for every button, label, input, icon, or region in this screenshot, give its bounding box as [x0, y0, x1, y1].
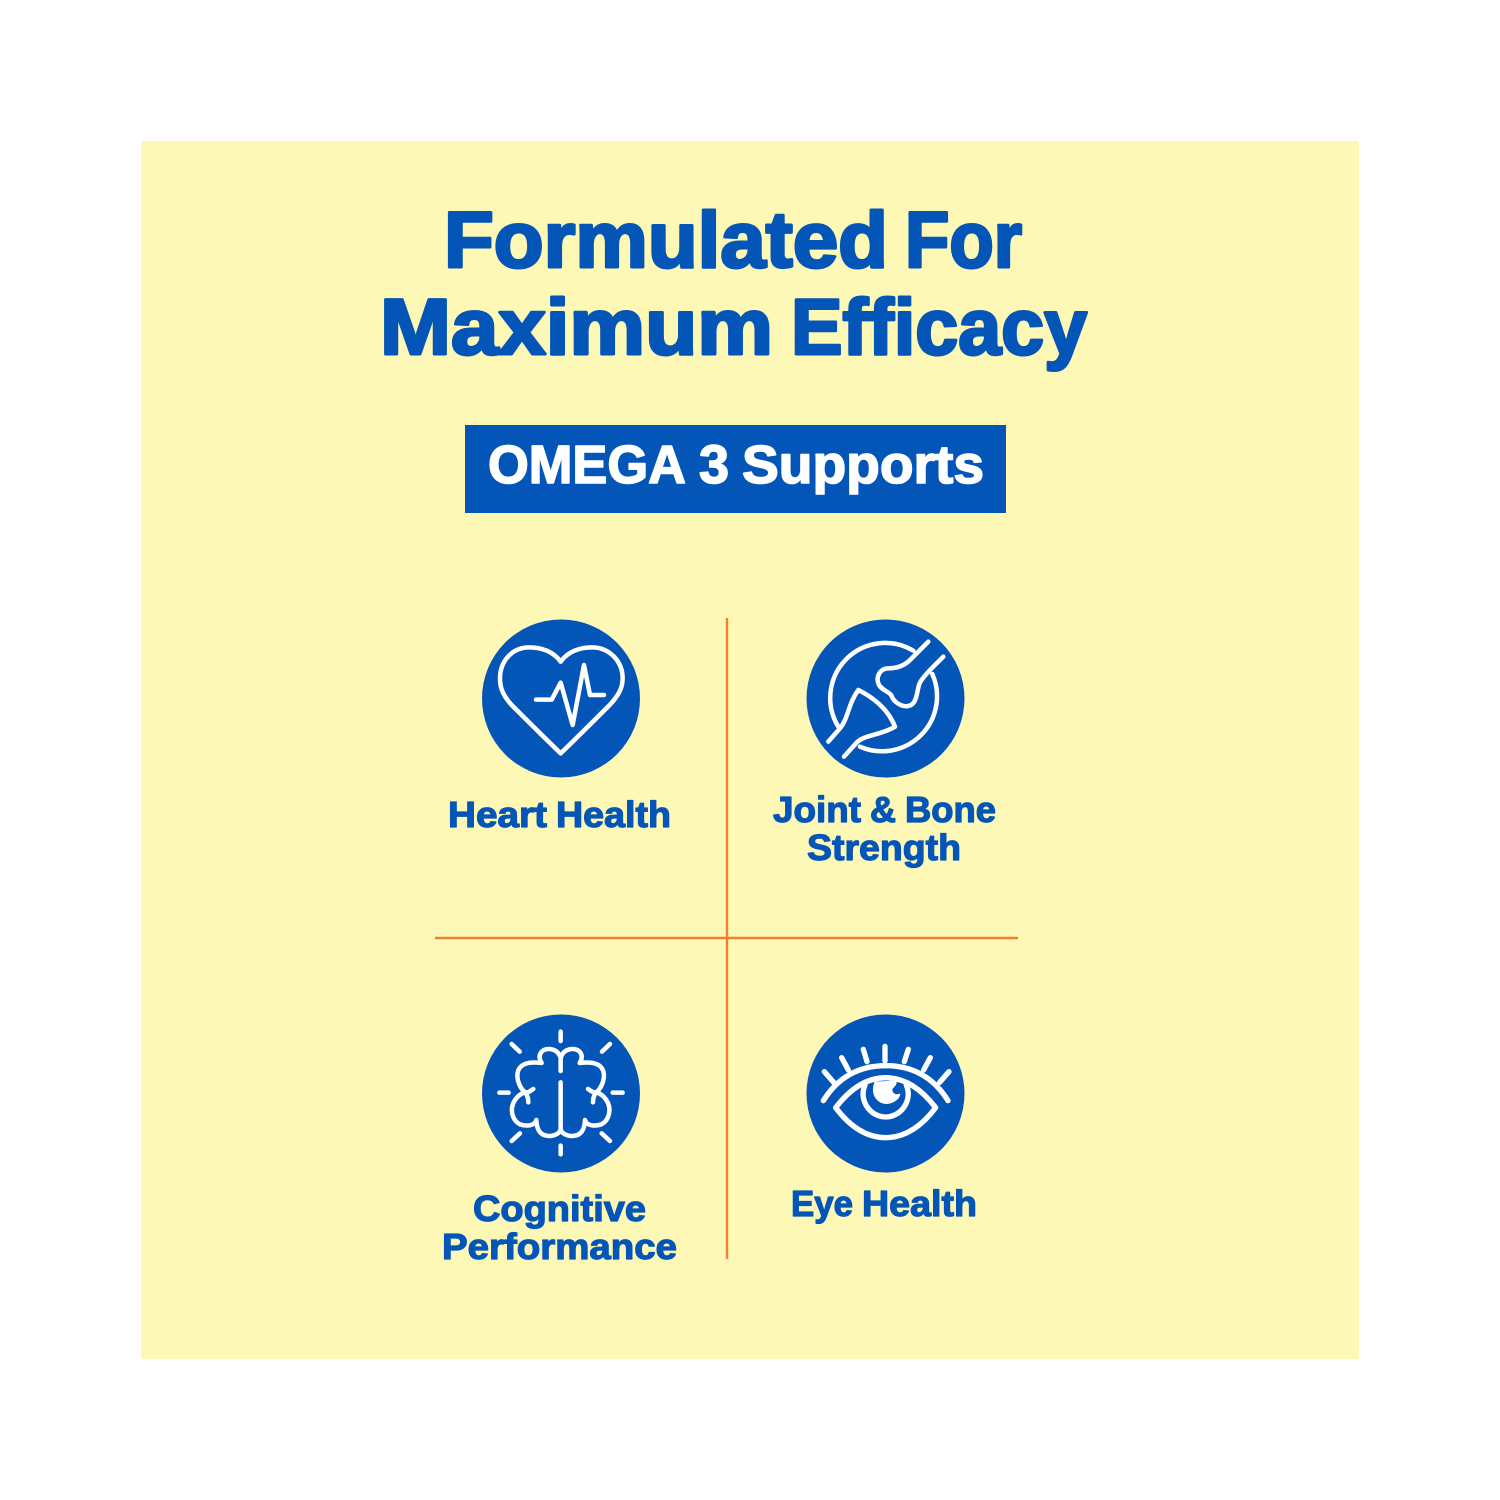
label: Cognitive Performance: Performance — [442, 1226, 677, 1267]
icon: joint — [806, 620, 964, 778]
label: Eye Health: Health — [862, 1183, 977, 1224]
label: Eye Health — [791, 1183, 977, 1224]
badge: OMEGA 3 Supports: OMEGA — [488, 435, 686, 495]
icon: eye with lashes — [806, 1014, 964, 1172]
icon: heart with pulse — [482, 620, 640, 778]
title: For — [905, 195, 1022, 284]
benefit: cognitive performance — [442, 1014, 677, 1267]
benefit: eye health — [791, 1014, 977, 1224]
label: Heart Health — [448, 794, 671, 835]
icon: brain with rays — [482, 1014, 640, 1172]
label: Joint & Bone Strength: Joint — [773, 789, 861, 830]
label: Joint & Bone Strength: Strength — [807, 827, 961, 868]
benefit: heart health — [448, 620, 671, 835]
panel: yellow background — [141, 141, 1359, 1359]
title: Maximum — [380, 282, 773, 371]
title — [380, 195, 1087, 371]
label: Heart Health: Heart — [448, 794, 547, 835]
label: Cognitive Performance — [442, 1188, 677, 1267]
badge: OMEGA 3 Supports: 3 — [699, 435, 729, 495]
title: Formulated — [444, 195, 888, 284]
grid divider: vertical and horizontal lines — [435, 618, 1018, 1259]
label: Joint & Bone Strength: Bone — [905, 789, 996, 830]
title: Efficacy — [791, 282, 1087, 371]
badge: OMEGA 3 Supports: Supports — [742, 435, 984, 495]
label: Eye Health: Eye — [791, 1183, 853, 1224]
label: Cognitive Performance: Cognitive — [473, 1188, 646, 1229]
benefit: joint and bone strength — [773, 620, 996, 868]
label: Joint & Bone Strength: & — [870, 789, 896, 830]
label: Joint & Bone Strength — [773, 789, 996, 868]
badge: OMEGA 3 Supports — [465, 425, 1006, 513]
label: Heart Health: Health — [556, 794, 671, 835]
